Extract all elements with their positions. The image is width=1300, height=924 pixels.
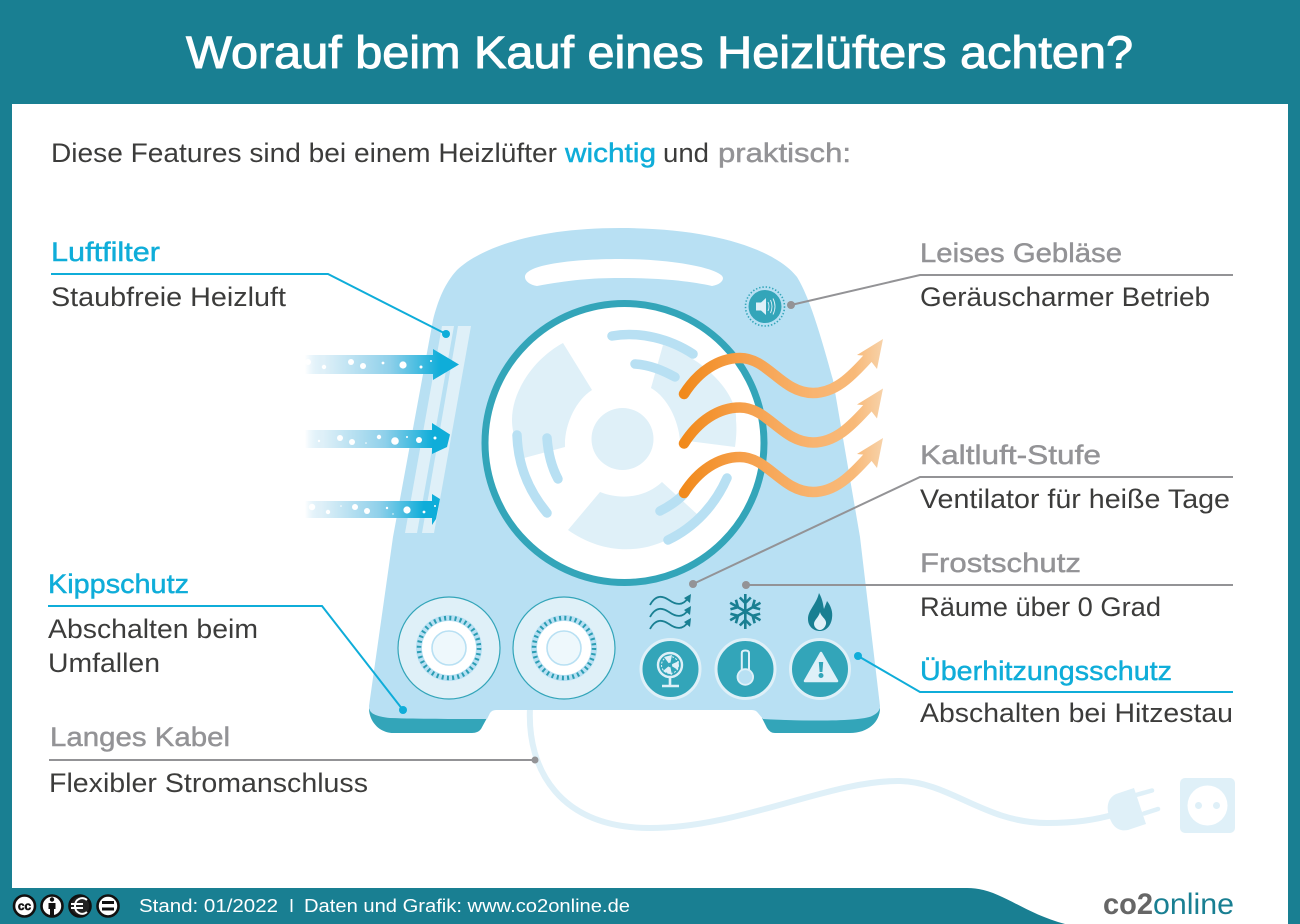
icon: speaker xyxy=(746,287,784,326)
logo: co2online: online xyxy=(1153,888,1234,921)
icon: flame xyxy=(808,593,832,631)
callout: Kippschutz: Abschalten beim xyxy=(48,614,258,644)
callout: Überhitzungsschutz xyxy=(854,652,1233,728)
callout: Luftfilter: Luftfilter xyxy=(51,237,160,267)
plug xyxy=(1108,788,1158,830)
warm air arrow 2 xyxy=(684,388,883,444)
intro sentence: Diese Features sind bei einem Heizlüfter xyxy=(51,138,557,168)
air filter xyxy=(405,326,471,533)
callout: Kaltluft-Stufe: Ventilator für heiße Tage xyxy=(920,484,1230,514)
intro sentence xyxy=(51,138,851,168)
socket xyxy=(1180,778,1235,833)
icon: snowflake xyxy=(727,594,763,629)
cold air arrow 2 xyxy=(305,423,450,454)
footer source text: I xyxy=(289,896,294,916)
fan window xyxy=(485,304,764,582)
callout: Frostschutz xyxy=(742,548,1233,622)
logo: co2online: co2 xyxy=(1103,888,1153,921)
licence icons xyxy=(14,896,118,916)
callout: Leises Gebläse: Leises Gebläse xyxy=(920,238,1122,268)
callout: Langes Kabel xyxy=(49,722,538,798)
callout: Überhitzungsschutz: Überhitzungsschutz xyxy=(920,656,1172,686)
icon: thermometer button xyxy=(716,640,775,698)
callout: Luftfilter xyxy=(51,237,450,338)
footer source text: Daten und Grafik: www.co2online.de xyxy=(304,896,630,916)
callout: Kaltluft-Stufe: Kaltluft-Stufe xyxy=(920,440,1101,470)
callout: Frostschutz: Räume über 0 Grad xyxy=(920,592,1161,622)
intro sentence: wichtig xyxy=(564,138,656,168)
cold air arrow 3 xyxy=(305,494,440,525)
callout: Kaltluft-Stufe xyxy=(689,440,1233,588)
callout: Frostschutz: Frostschutz xyxy=(920,548,1081,578)
icon: non commercial xyxy=(70,896,90,916)
icon: no derivatives xyxy=(98,896,118,916)
icon: cold air waves xyxy=(650,594,691,629)
title: Worauf beim Kauf eines Heizlüfters achten? xyxy=(186,27,1133,78)
logo: co2online xyxy=(1103,888,1234,921)
callout: Langes Kabel: Langes Kabel xyxy=(50,722,230,752)
control knob right xyxy=(513,597,615,699)
fan blades xyxy=(512,343,736,549)
intro sentence: praktisch: xyxy=(718,138,851,168)
warm air arrow 3 xyxy=(684,438,883,493)
callout: Überhitzungsschutz: Abschalten bei Hitzestau xyxy=(920,698,1233,728)
callout: Langes Kabel: Flexibler Stromanschluss xyxy=(49,768,368,798)
callout: Kippschutz xyxy=(48,569,407,714)
power cord and socket xyxy=(530,708,1235,833)
callout: Luftfilter: Staubfreie Heizluft xyxy=(51,282,287,312)
heater illustration xyxy=(369,228,880,733)
intro sentence: und xyxy=(663,138,709,168)
icon: fan button xyxy=(641,640,700,698)
icon: warning button xyxy=(790,640,850,698)
callout: Kippschutz: Kippschutz xyxy=(48,569,189,599)
icon: cc: cc xyxy=(18,899,31,913)
handle xyxy=(525,259,723,286)
cable xyxy=(530,708,1116,828)
callout: Leises Gebläse: Geräuscharmer Betrieb xyxy=(920,282,1210,312)
icon: attribution xyxy=(42,896,62,916)
footer source text: Stand: 01/2022 xyxy=(139,896,278,916)
control knob left xyxy=(398,597,500,699)
heater body xyxy=(369,228,880,721)
callout: Kippschutz: Umfallen xyxy=(48,648,160,678)
warm air arrow 1 xyxy=(684,339,883,394)
heater feet xyxy=(369,708,880,733)
footer source text xyxy=(139,896,630,916)
callout: Leises Gebläse xyxy=(787,238,1233,312)
cold air arrow 1 xyxy=(305,349,459,380)
airflow arcs xyxy=(517,335,727,540)
